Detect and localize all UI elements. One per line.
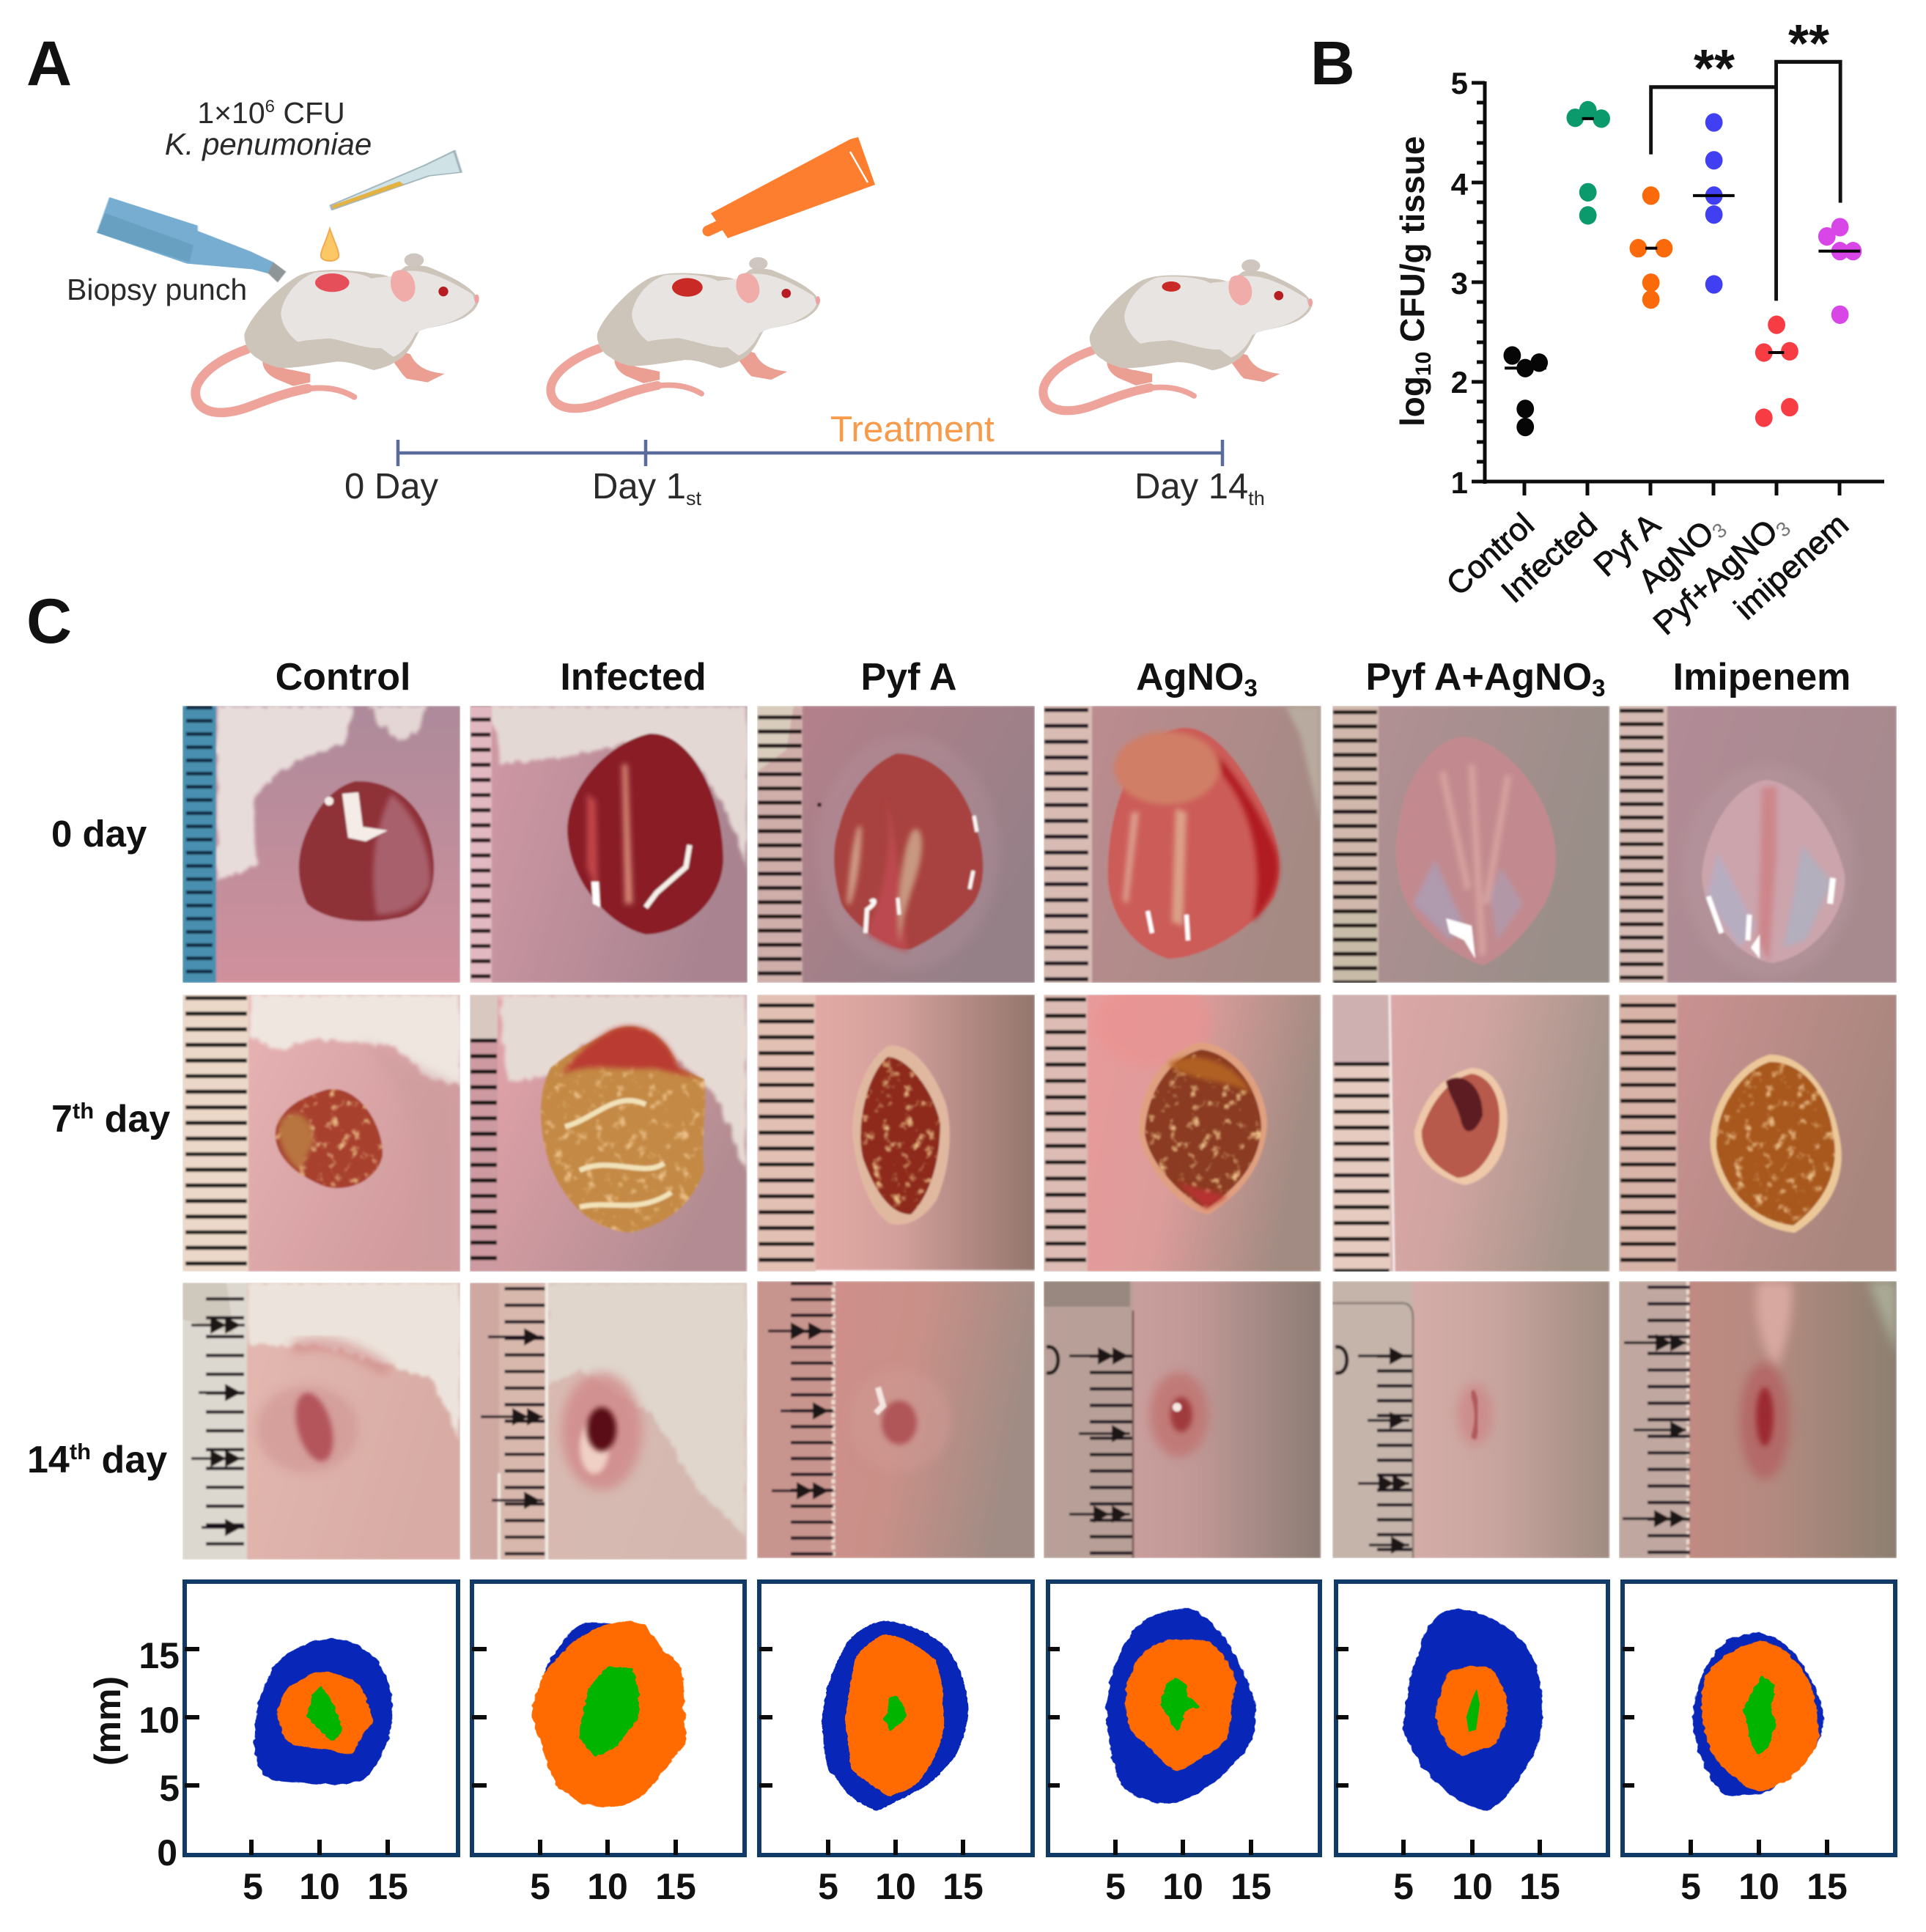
contour plot: Infected: 15 (655, 1866, 696, 1907)
y-axis numbers: 1 (1451, 465, 1468, 500)
panel C: wound photo grid and contours (26, 586, 1897, 1907)
photo: Imipenem 0 day (1619, 706, 1897, 983)
photo: Pyf A 0 day (757, 706, 1035, 983)
photo: Infected 14th day with ruler (470, 1283, 747, 1560)
photo: AgNO3 0 day (1044, 706, 1321, 983)
row label: 7th day: day (94, 1098, 170, 1140)
data points, medians and significance brackets (1503, 62, 1862, 436)
x-axis labels: Pyf A (1587, 506, 1667, 583)
icon: ointment tube (708, 137, 875, 238)
contour plot: Pyf A (759, 1582, 1033, 1907)
icon: biopsy punch (97, 197, 286, 282)
significance brackets (1651, 62, 1840, 301)
label: bacterium: K. penumoniae (165, 127, 372, 161)
label: biopsy punch: Biopsy punch (67, 273, 247, 306)
contour plot: Imipenem: 5 (1680, 1866, 1701, 1907)
label: inoculum dose: CFU (275, 96, 345, 130)
heading: C: C (26, 586, 72, 657)
photo: Imipenem 14th day with ruler (1619, 1281, 1897, 1558)
label: Day 14th: th (1248, 487, 1265, 509)
photo: Pyf A+AgNO3 14th day with ruler (1332, 1281, 1609, 1558)
y-axis numbers (1451, 66, 1469, 500)
icon: mouse day 1 (550, 257, 820, 408)
group: imipenem (1818, 218, 1862, 324)
photo: Pyf A 14th day with ruler (757, 1281, 1035, 1558)
contour plot: AgNO3 (1048, 1582, 1320, 1907)
column headings: Control (276, 656, 410, 698)
contour plot: Pyf A: 15 (942, 1866, 984, 1907)
contour plot: Imipenem: 15 (1807, 1866, 1848, 1907)
column headings: 3 (1592, 674, 1606, 701)
x-axis labels: 3 (1771, 517, 1795, 542)
photo: AgNO3 14th day with ruler (1044, 1281, 1321, 1558)
x-axis labels: Infected (1495, 506, 1604, 610)
contour plot: Infected (472, 1582, 745, 1907)
group: Infected (1566, 101, 1610, 225)
group: Control (1503, 346, 1548, 436)
x-axis labels: Control (1439, 506, 1541, 602)
contour plot: Pyf A+AgNO3 (1336, 1582, 1608, 1907)
significance stars left: ** (1694, 40, 1735, 98)
row label: 7th day: 7 (51, 1098, 73, 1140)
photo: Control 14th day with ruler (182, 1283, 460, 1560)
y-axis numbers: 0 (157, 1832, 177, 1873)
column headings: AgNO (1136, 656, 1244, 698)
label: Day 1st: st (686, 487, 702, 509)
contour plot: Pyf A+AgNO3: 5 (1393, 1866, 1414, 1907)
y-axis numbers: 15 (139, 1635, 180, 1676)
axes with ticks (1472, 81, 1884, 495)
row label: 0 day: 0 day (51, 813, 147, 855)
icon: bacterial droplet (321, 229, 339, 261)
x-axis labels: 3 (1708, 518, 1731, 543)
contour plot: AgNO3: 5 (1105, 1866, 1126, 1907)
y-axis numbers: 5 (1451, 66, 1468, 100)
contour plot: Pyf A: 5 (818, 1866, 838, 1907)
y-axis numbers: 2 (1451, 365, 1468, 399)
photo: Pyf A+AgNO3 0 day (1332, 706, 1609, 983)
icon: pipette tip (331, 151, 461, 210)
column headings (276, 656, 1851, 701)
y-axis numbers: 10 (139, 1700, 180, 1741)
photo: Control 7th day (182, 995, 460, 1272)
contour plot: Imipenem: 10 (1738, 1866, 1779, 1907)
contour plot: Control: 10 (299, 1866, 340, 1907)
x-axis labels: Pyf+AgNO (1647, 512, 1785, 642)
column headings: Imipenem (1673, 656, 1851, 698)
y-axis title: CFU/g tissue (1393, 136, 1431, 352)
column headings: Pyf A (860, 656, 957, 698)
contour plot: Pyf A+AgNO3: 10 (1452, 1866, 1493, 1907)
row label: 14th day: th (70, 1439, 91, 1464)
significance stars right: ** (1788, 15, 1829, 73)
contour plot: Control (185, 1582, 458, 1907)
group: Pyf A (1629, 186, 1672, 309)
y-axis numbers: 4 (1451, 167, 1469, 202)
contour plot: AgNO3: 10 (1162, 1866, 1203, 1907)
x-axis labels (1439, 505, 1856, 644)
y-axis numbers: 3 (1451, 266, 1468, 301)
label: inoculum dose: 6 (265, 97, 275, 117)
photo: Infected 0 day (470, 706, 748, 983)
x-axis labels: imipenem (1727, 506, 1856, 627)
y-axis label: (mm): (mm) (87, 1676, 128, 1766)
contour plot: Control: 5 (243, 1866, 263, 1907)
icon: mouse day 14 (1043, 259, 1313, 410)
photo: AgNO3 7th day (1044, 980, 1321, 1272)
heading: A: A (26, 29, 72, 99)
row label: 14th day: day (91, 1439, 167, 1481)
contour plot: Pyf A: 10 (875, 1866, 916, 1907)
label: treatment: Treatment (830, 409, 995, 449)
column headings: 3 (1244, 674, 1258, 701)
label: Day 1st: Day 1 (592, 467, 686, 506)
photo: Pyf A+AgNO3 7th day (1332, 995, 1609, 1272)
panel B: CFU dot plot (1310, 15, 1884, 644)
row label: 14th day: 14 (27, 1439, 70, 1481)
contour plot: Control: 15 (367, 1866, 408, 1907)
column headings: Pyf A+AgNO (1365, 656, 1592, 698)
photo: Control 0 day (182, 706, 460, 983)
contour plot: Pyf A+AgNO3: 15 (1519, 1866, 1560, 1907)
group: AgNO3 (1693, 113, 1735, 294)
timeline axis (398, 440, 1222, 466)
group: Pyf+AgNO3 (1755, 315, 1798, 427)
y-axis title: 10 (1412, 352, 1436, 376)
photo: Imipenem 7th day (1619, 995, 1897, 1272)
x-axis labels: AgNO (1631, 514, 1721, 600)
photo: Pyf A 7th day (757, 995, 1035, 1272)
panel A: experimental timeline (26, 29, 1313, 509)
photo: Infected 7th day (470, 995, 747, 1272)
label: 0 Day: 0 Day (344, 467, 439, 506)
y-axis title: log (1393, 376, 1431, 427)
contour plot: Infected: 5 (530, 1866, 550, 1907)
label: inoculum dose: 1×10 (197, 96, 265, 130)
contour plot: Infected: 10 (587, 1866, 628, 1907)
y-axis numbers: 5 (159, 1768, 180, 1809)
column headings: Infected (560, 656, 706, 698)
contour plot: Imipenem (1623, 1582, 1895, 1907)
heading: B: B (1310, 29, 1355, 97)
icon: mouse day 0 (196, 254, 479, 413)
y-axis numbers (139, 1635, 180, 1873)
label: Day 14th: Day 14 (1134, 467, 1248, 506)
row label: 7th day: th (73, 1098, 94, 1124)
contour plot: AgNO3: 15 (1230, 1866, 1272, 1907)
